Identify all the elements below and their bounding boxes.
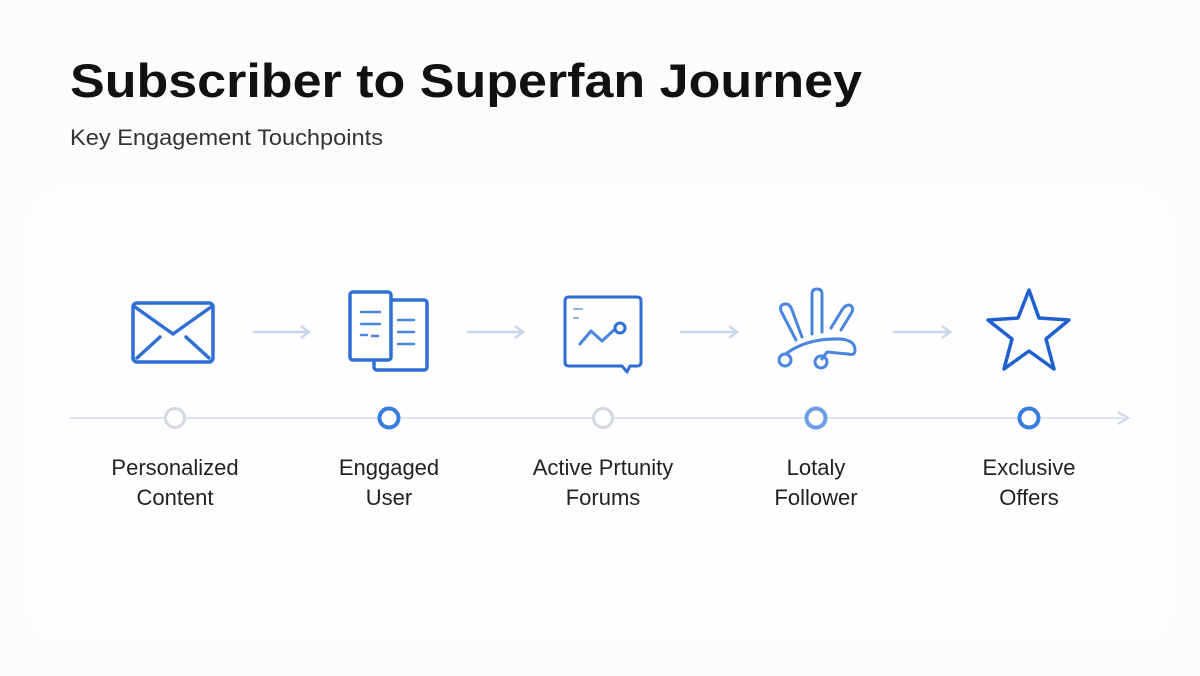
icon: hand (779, 289, 855, 368)
arrow 1 (253, 326, 309, 338)
step 2: Enggaged (339, 455, 439, 480)
step 4: Follower (774, 485, 858, 510)
step 2: User (366, 485, 412, 510)
icon: documents (350, 292, 427, 370)
icon: chart bubble (565, 297, 641, 372)
step 5: Exclusive (983, 455, 1075, 480)
step 5 (983, 408, 1075, 510)
step 3 (533, 408, 673, 510)
step 5: Offers (999, 485, 1059, 510)
step 2 (339, 408, 439, 510)
subtitle: Key Engagement Touchpoints (70, 125, 383, 150)
step 4 (774, 408, 858, 510)
arrow 4 (893, 326, 950, 338)
step 1: Content (136, 485, 214, 510)
step 3: Forums (566, 485, 640, 510)
icon: envelope (133, 303, 213, 362)
step 1: Personalized (111, 455, 239, 480)
step 3: Active Prtunity (533, 455, 673, 480)
icon: star (988, 290, 1069, 369)
step 1 (111, 408, 239, 510)
step 4: Lotaly (787, 455, 845, 480)
timeline line (70, 412, 1128, 424)
title: Subscriber to Superfan Journey (70, 54, 862, 107)
arrow 2 (467, 326, 523, 338)
arrow 3 (680, 326, 737, 338)
